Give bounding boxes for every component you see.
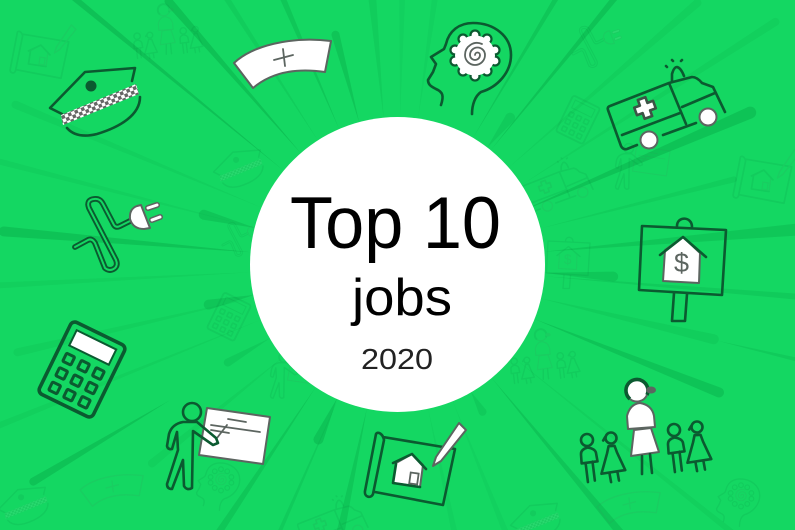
icon: nurse hat: [234, 40, 331, 88]
child: girl left: [599, 432, 626, 483]
icon: ambulance: [608, 60, 725, 149]
subtitle: jobs: jobs: [350, 269, 452, 327]
white centre circle: [250, 117, 545, 412]
icon: head with gear: [428, 23, 511, 114]
icon: plug and cable: [75, 199, 160, 270]
dollar sign: $: [674, 248, 689, 278]
title: Top 10: Top 10: [290, 183, 501, 264]
icon: nanny with children: [580, 379, 712, 483]
child: girl right: [685, 421, 712, 472]
icon: blueprint and pencil: [365, 423, 466, 505]
icon: teacher at board: [167, 403, 270, 489]
icon: calculator: [38, 320, 126, 419]
icon: for-sale house sign: [639, 219, 726, 321]
icon: police cap: [50, 68, 140, 136]
year: 2020: 2020: [361, 344, 433, 376]
child: boy right: [667, 423, 686, 472]
child: boy left: [580, 433, 599, 482]
